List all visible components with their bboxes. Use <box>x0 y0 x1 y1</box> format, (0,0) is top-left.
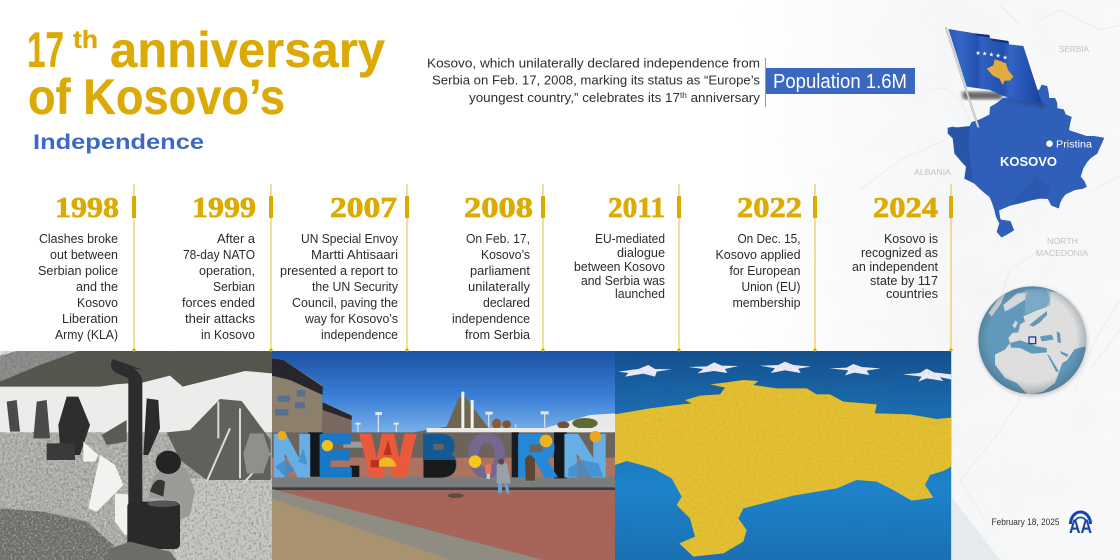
event 1998 <box>38 192 119 342</box>
event 2024 <box>852 192 938 301</box>
event 2008: unilaterally <box>468 279 530 294</box>
event 1998: Serbian police <box>38 263 118 278</box>
photo: refugee camp <box>0 351 272 560</box>
event 2024: an independent <box>852 259 938 274</box>
event 2022: 2022 <box>737 192 802 224</box>
intro text: anniversary <box>687 90 761 105</box>
map of Kosovo <box>948 85 1103 237</box>
flag stars: ★ <box>1002 55 1008 62</box>
event 2022: Kosovo applied <box>716 247 800 262</box>
event 2008: On Feb. 17, <box>466 231 530 246</box>
event 2007: independence <box>321 327 398 342</box>
intro text: th <box>680 91 687 100</box>
timeline <box>38 184 953 352</box>
title: 17 <box>27 22 64 78</box>
letters of the sign: O <box>468 424 505 488</box>
event 1999: After a <box>217 231 256 246</box>
event 2022: membership <box>732 295 800 310</box>
event 1998: Kosovo <box>77 295 118 310</box>
event 1998: 1998 <box>55 192 119 224</box>
event 2024: countries <box>886 286 938 301</box>
event 1999: forces ended <box>182 295 255 310</box>
flag stars: ★ <box>989 51 994 58</box>
locator globe <box>977 285 1090 397</box>
country labels: SERBIA <box>1059 45 1090 54</box>
event 1998: Clashes broke <box>39 231 118 246</box>
event 2007: UN Special Envoy <box>301 231 398 246</box>
event 2024: state by 117 <box>870 273 938 288</box>
letters of the sign <box>274 431 606 478</box>
country labels <box>914 45 1090 258</box>
date: February 18, 2025 <box>992 517 1060 528</box>
event 2011: EU-mediated <box>595 231 665 246</box>
event 2022: for European <box>730 263 800 278</box>
event 2024: recognized as <box>861 245 938 260</box>
flag territory <box>987 59 1013 85</box>
event 1999: their attacks <box>185 311 255 326</box>
land <box>995 290 1090 395</box>
event 1999: operation, <box>199 263 255 278</box>
event 2008: declared <box>483 295 530 310</box>
Kosovo label: KOSOVO <box>1000 154 1057 169</box>
intro text: Serbia on Feb. 17, 2008, marking its status as “Europe’s <box>432 72 760 88</box>
flag stars <box>618 362 951 382</box>
event 2011 <box>574 192 665 301</box>
intro text: Kosovo, which unilaterally declared independence from <box>427 56 760 70</box>
letters of the sign: N <box>272 424 312 488</box>
country labels: ALBANIA <box>914 168 952 177</box>
event 2007: presented a report to <box>280 263 398 278</box>
event 2008: from Serbia <box>465 327 531 342</box>
event 2022: Union (EU) <box>742 279 800 294</box>
flag stars: ★ <box>995 53 1001 60</box>
title: th <box>73 26 98 54</box>
event 1999: 1999 <box>192 192 256 224</box>
event 2007: Martti Ahtisaari <box>311 247 398 262</box>
map background <box>860 0 1120 560</box>
AA logo: AA <box>1069 517 1092 538</box>
photo: flag mosaic <box>615 351 951 560</box>
event 2007: way for Kosovo’s <box>304 311 398 326</box>
title <box>27 22 385 125</box>
flag stars <box>975 50 1008 62</box>
event 2008: independence <box>452 311 530 326</box>
timeline axes <box>132 184 953 352</box>
event 1998: Liberation <box>62 311 118 326</box>
country labels: MACEDONIA <box>1036 249 1089 258</box>
event 2007: 2007 <box>330 192 397 224</box>
photo: Newborn monument <box>272 351 615 560</box>
Kosovo location marker <box>1029 337 1036 344</box>
letters of the sign: W <box>362 424 415 488</box>
population callout: Population 1.6M <box>773 71 907 93</box>
intro text: youngest country,” celebrates its 17 <box>469 90 673 105</box>
event 2007: the UN Security <box>312 279 398 294</box>
event 2022: On Dec. 15, <box>738 231 800 246</box>
event 2011: 2011 <box>608 192 665 224</box>
event 1999: in Kosovo <box>201 327 255 342</box>
event 2011: between Kosovo <box>574 259 665 274</box>
event 2008: 2008 <box>464 192 533 224</box>
title: of Kosovo’s <box>28 69 285 125</box>
event 1998: and the <box>76 279 118 294</box>
event 2011: launched <box>615 286 665 301</box>
event 2008 <box>452 192 533 342</box>
event 1999: Serbian <box>213 279 255 294</box>
event 2024: 2024 <box>873 192 938 224</box>
event 2011: dialogue <box>617 245 665 260</box>
event 2011: and Serbia was <box>581 273 665 288</box>
event 2007 <box>280 192 398 342</box>
yellow territory <box>615 380 951 557</box>
event 1998: Army (KLA) <box>55 327 118 342</box>
letters of the sign: E <box>318 424 352 488</box>
letters of the sign: N <box>562 424 608 488</box>
event 2024: Kosovo is <box>884 231 938 246</box>
title: anniversary <box>110 22 385 78</box>
event 2022 <box>716 192 802 310</box>
visitors <box>485 454 535 493</box>
population callout <box>765 58 915 107</box>
letters of the sign: R <box>516 424 556 488</box>
Pristina marker: Pristina <box>1056 140 1092 150</box>
event 1999 <box>182 192 256 342</box>
flag stars: ★ <box>975 50 981 57</box>
event 1998: out between <box>50 247 118 262</box>
flag stars: ★ <box>982 51 987 58</box>
event 2007: Council, paving the <box>292 295 398 310</box>
letters of the sign: B <box>421 424 457 488</box>
seas <box>1010 340 1047 354</box>
event 1999: 78-day NATO <box>183 247 255 262</box>
event 2008: parliament <box>470 263 530 278</box>
country labels: NORTH <box>1047 237 1078 246</box>
subtitle: Independence <box>33 131 204 154</box>
intro text <box>427 56 761 105</box>
event 2008: Kosovo’s <box>481 247 530 262</box>
flag of Kosovo <box>945 27 1046 127</box>
